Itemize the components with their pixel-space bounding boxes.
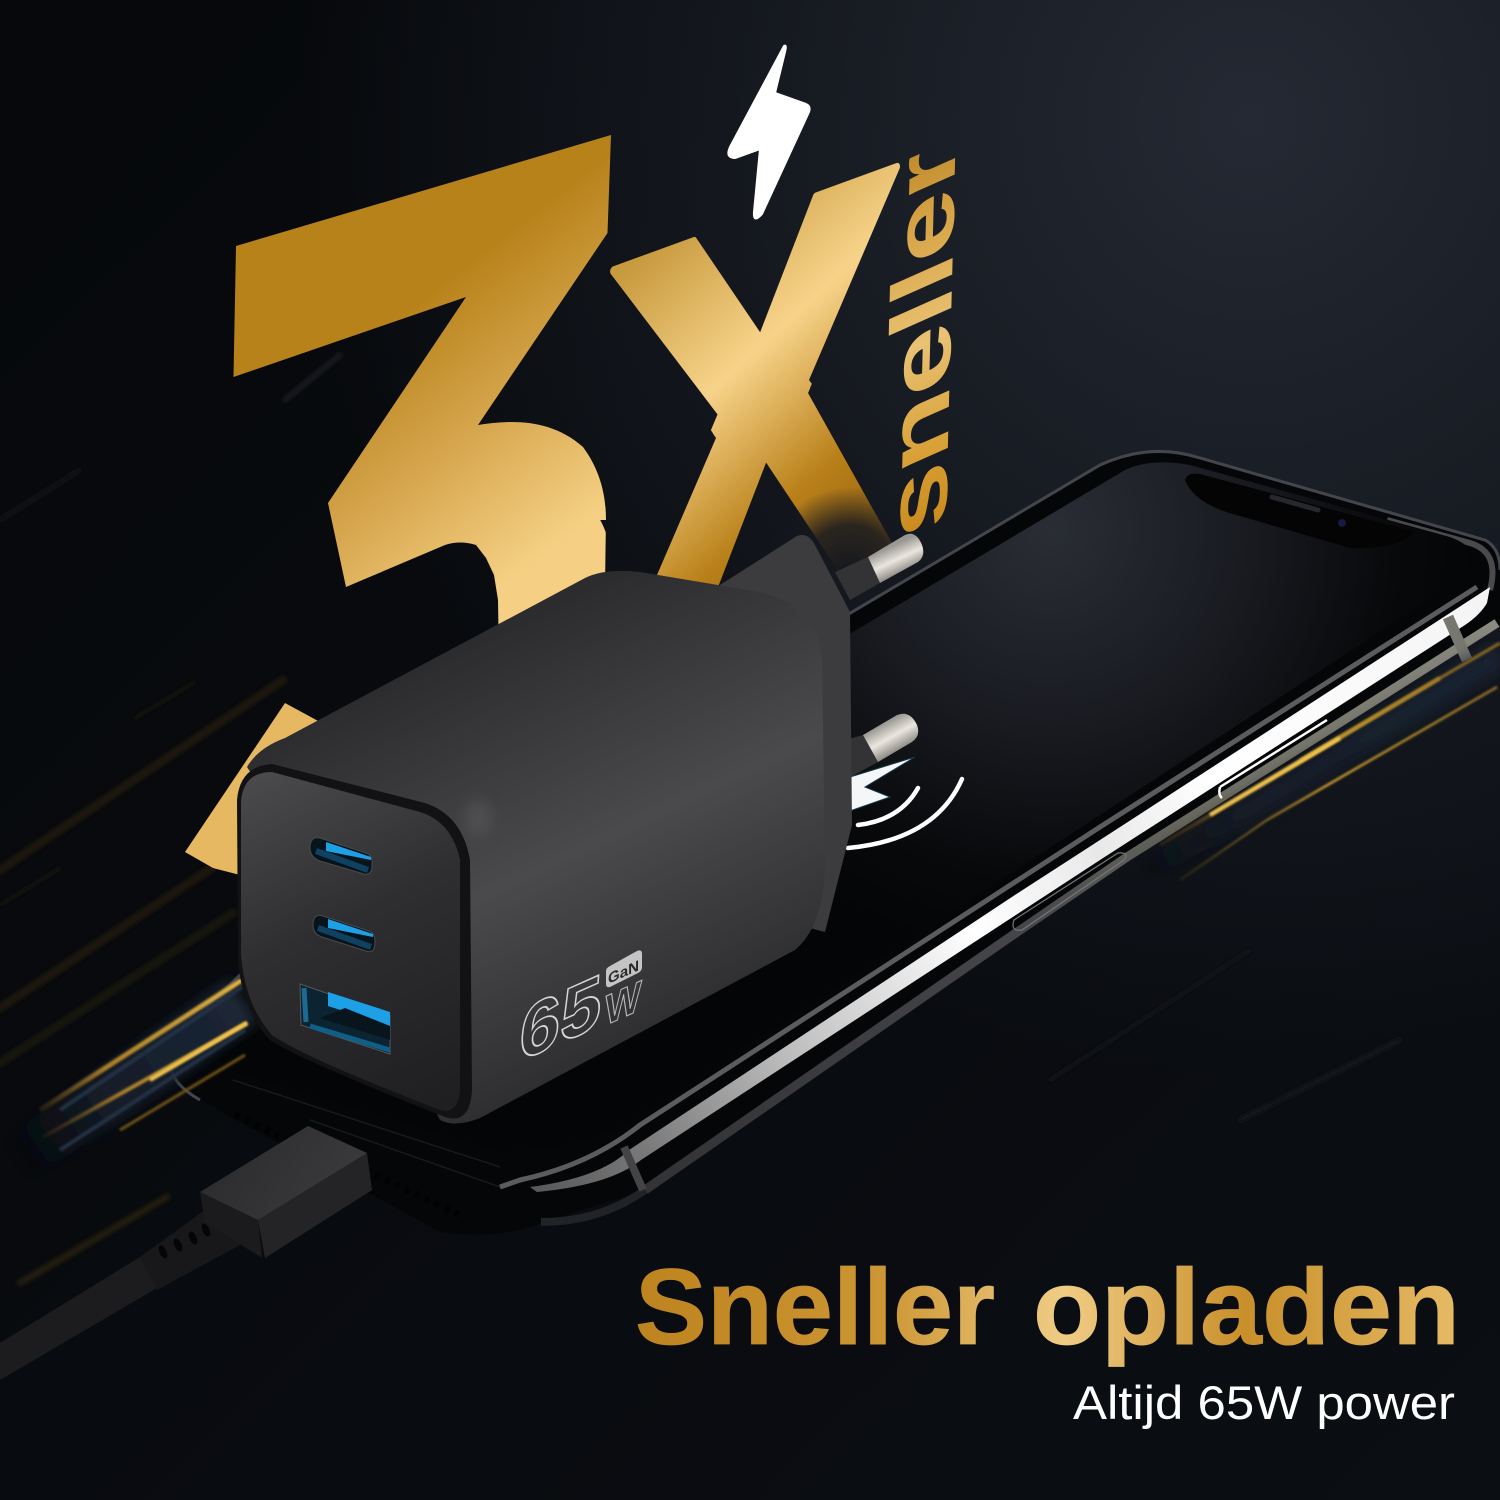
big number 3: [185, 135, 611, 874]
heading: Sneller: [635, 1246, 995, 1367]
phone outline: [171, 451, 1500, 1100]
flat top and shoulder of the 3: [234, 135, 611, 587]
phone reflection band: [645, 623, 1497, 1190]
cable cord: [0, 1257, 157, 1380]
lower pin: [845, 714, 918, 780]
charger front face: [241, 772, 460, 1111]
big letter x: [610, 162, 900, 586]
phone lower edge curve: [541, 1190, 645, 1222]
icon: small lightning with signal arcs: [847, 757, 962, 848]
corner highlight: [464, 800, 492, 836]
phone silver band: [530, 587, 1490, 1192]
phone corner edge: [1387, 520, 1492, 590]
phone notch: [1185, 474, 1415, 548]
fade of the x into the plug: [765, 487, 935, 657]
lower hook of the 3: [185, 703, 330, 875]
phone: [171, 451, 1500, 1234]
subheading: Altijd 65W power: [1073, 1376, 1455, 1429]
phone side buttons: [1013, 720, 1327, 930]
cable: [0, 1126, 372, 1380]
icon: white lightning bolt: [728, 46, 810, 219]
USB-C port 1: [310, 838, 372, 874]
vertical word: sneller: sneller: [868, 128, 974, 558]
grey bands across edge: [624, 617, 1467, 1190]
speaker and camera: [1272, 497, 1346, 527]
charger body side: [247, 571, 825, 1124]
USB-C port 2: [313, 915, 375, 952]
USB-A port: [300, 984, 390, 1054]
charger: [237, 534, 923, 1124]
plug base: [700, 535, 852, 932]
charger front rim: [237, 764, 472, 1118]
heading: opladen: [1033, 1246, 1460, 1367]
phone screen: [214, 462, 1474, 1152]
phone grey bezel line: [500, 587, 1477, 1187]
front edge lines: [233, 1080, 500, 1187]
phone bottom speaker grille: [235, 1115, 460, 1215]
65W GaN label: W: [603, 972, 643, 1036]
connector housing: [200, 1126, 372, 1258]
phone body: [171, 451, 1500, 1234]
GaN badge: GaN: [608, 958, 639, 988]
65W GaN label: 65: [517, 957, 605, 1078]
upper pin: [835, 534, 923, 600]
strain relief: [140, 1210, 240, 1290]
speed streak band left: [10, 980, 247, 1165]
65W GaN label: [517, 950, 643, 1078]
speed streaks right: [1140, 643, 1500, 880]
faint background streaks: [0, 240, 1400, 1283]
